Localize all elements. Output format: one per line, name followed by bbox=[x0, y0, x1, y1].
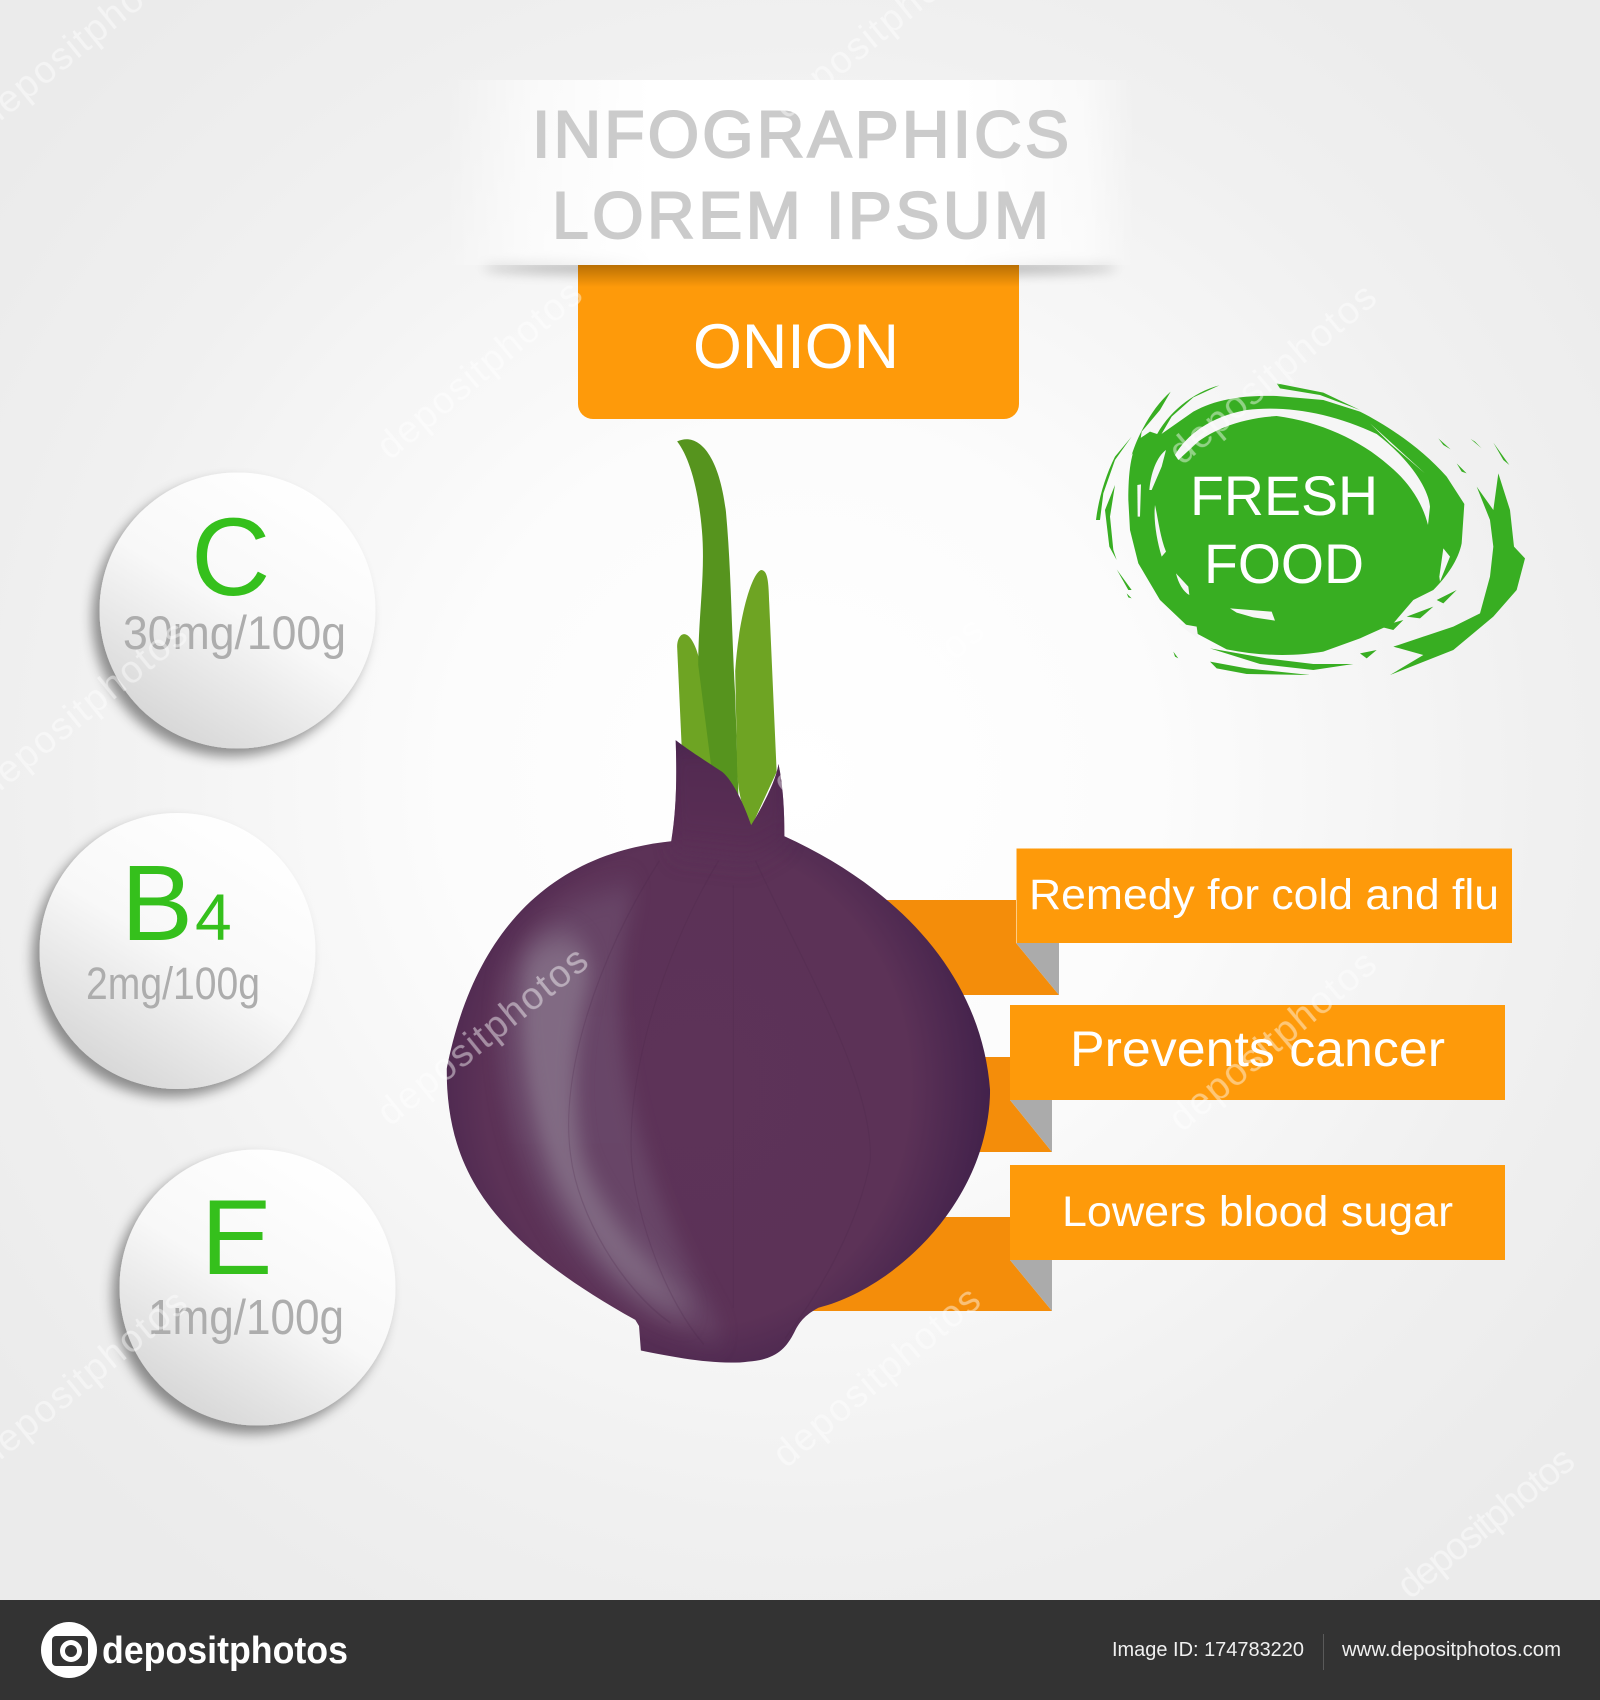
ribbon 1: Remedy for cold and flu bbox=[1029, 871, 1499, 919]
vitamin B4 disc: B bbox=[121, 842, 193, 963]
broad highlight wash bbox=[498, 885, 726, 1338]
vitamin E disc: E bbox=[201, 1177, 272, 1297]
logo wordmark: depositphotos bbox=[102, 1630, 348, 1672]
vitamin B4 disc: 4 bbox=[195, 880, 232, 954]
vitamin C disc: 30mg/100g bbox=[123, 606, 346, 659]
stock watermarks: depositphotos bbox=[369, 939, 596, 1134]
onion bulb bbox=[446, 740, 990, 1363]
main brush blob bbox=[1128, 396, 1464, 655]
title banner bbox=[445, 80, 1135, 276]
onion label tab: ONION bbox=[693, 312, 899, 382]
leaf: tall centre bbox=[677, 439, 739, 812]
title line 1: INFOGRAPHICS bbox=[532, 97, 1069, 171]
outer brush strokes bbox=[1132, 392, 1171, 455]
ribbon 1 bbox=[860, 848, 1512, 995]
icon: camera logo bbox=[41, 1622, 97, 1678]
stock watermarks: depositphotos bbox=[1389, 1439, 1583, 1607]
stamp text line 1: FRESH bbox=[1190, 464, 1378, 527]
title line 2: LOREM IPSUM bbox=[552, 178, 1049, 252]
stock watermarks: depositphotos bbox=[765, 609, 992, 804]
vitamin B4 disc: 2mg/100g bbox=[86, 958, 260, 1009]
stamp text line 2: FOOD bbox=[1204, 532, 1364, 595]
footer bar bbox=[0, 1600, 1600, 1700]
brush gaps bbox=[1137, 409, 1450, 638]
ribbon 2: Prevents cancer bbox=[1070, 1021, 1445, 1077]
highlight bbox=[522, 937, 696, 1314]
leaf: right bbox=[735, 570, 777, 827]
vitamin E disc: 1mg/100g bbox=[148, 1291, 344, 1345]
fresh food stamp bbox=[1096, 383, 1525, 675]
website: www.depositphotos.com bbox=[1341, 1639, 1561, 1661]
vitamin E disc bbox=[120, 1150, 396, 1426]
vitamin C disc bbox=[100, 472, 376, 748]
ribbon 2 bbox=[960, 1005, 1505, 1152]
onion label tab bbox=[578, 265, 1019, 419]
vitamin C disc: C bbox=[191, 496, 270, 619]
ribbon 3: Lowers blood sugar bbox=[1062, 1188, 1453, 1236]
leaf: left bbox=[677, 634, 712, 772]
vitamin B4 disc bbox=[40, 813, 316, 1089]
right sweeping arc bbox=[1390, 473, 1525, 675]
stock watermarks: depositphotos bbox=[765, 1279, 989, 1476]
ribbon 3 bbox=[800, 1165, 1505, 1311]
stock watermarks: depositphotos bbox=[1161, 276, 1385, 473]
stock watermarks: depositphotos bbox=[1161, 943, 1385, 1140]
image id: Image ID: 174783220 bbox=[1112, 1639, 1304, 1661]
onion illustration bbox=[430, 439, 1010, 1380]
stock watermarks: depositphotos bbox=[369, 272, 590, 468]
